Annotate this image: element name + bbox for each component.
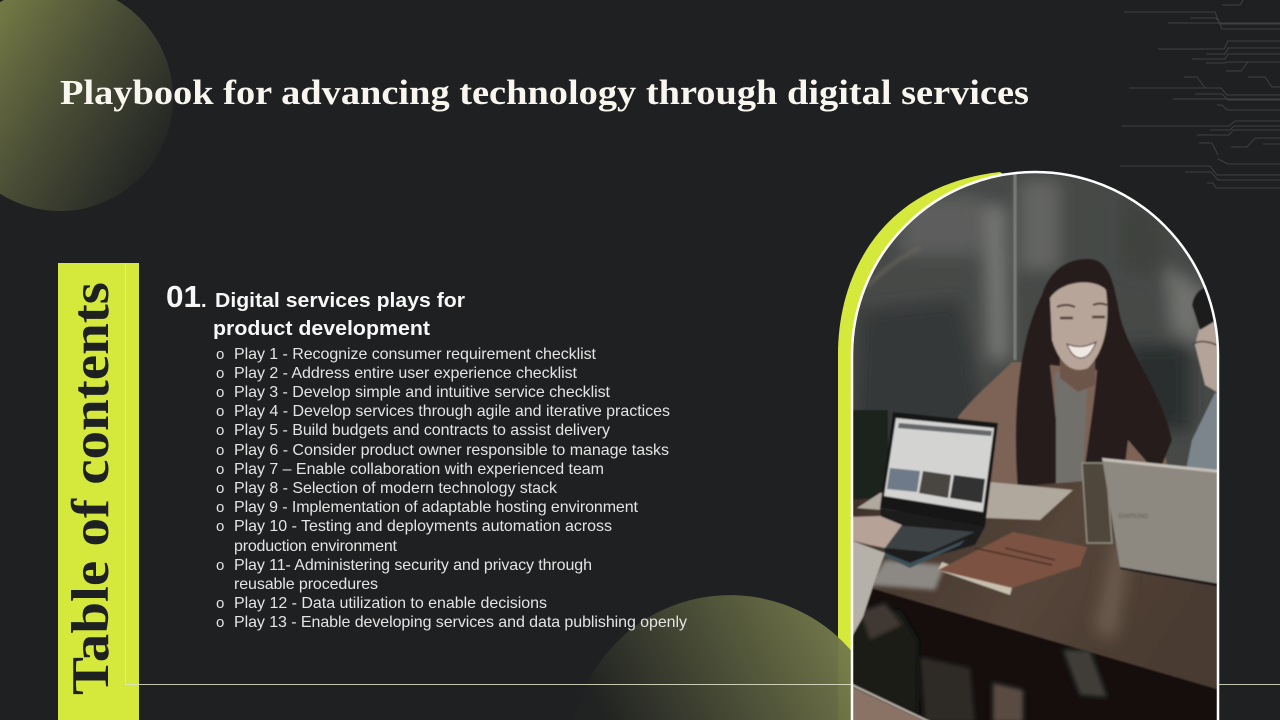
section number: 01	[166, 279, 201, 314]
list of plays: Play 9 - Implementation of adaptable hosting environment	[234, 499, 639, 516]
list of plays: o	[216, 442, 224, 459]
list of plays: o	[216, 480, 224, 497]
woman's neck	[1060, 355, 1095, 392]
table	[850, 470, 1220, 690]
list of plays: o	[216, 499, 224, 516]
lime arch behind photo	[838, 172, 1020, 720]
list of plays: o	[216, 365, 224, 382]
woman's face	[1050, 282, 1107, 370]
circuit line pattern top right	[1120, 0, 1280, 188]
list of plays	[216, 346, 687, 631]
hand and sleeve	[850, 516, 902, 548]
list of plays: Play 2 - Address entire user experience checklist	[234, 365, 578, 382]
list of plays: Play 4 - Develop services through agile and iterative practices	[234, 403, 670, 420]
list of plays: Play 6 - Consider product owner responsible to manage tasks	[234, 442, 669, 459]
list of plays: Play 12 - Data utilization to enable decisions	[234, 595, 547, 612]
list of plays: o	[216, 461, 224, 478]
list of plays: o	[216, 422, 224, 439]
under the table	[850, 578, 1220, 720]
lime sidebar	[58, 263, 139, 720]
heading line one: Digital services plays for	[215, 289, 465, 312]
list of plays: o	[216, 557, 224, 574]
white notebook	[857, 482, 1073, 520]
person on right	[1186, 393, 1217, 470]
list of plays: o	[216, 614, 224, 631]
leather notebook	[938, 532, 1087, 595]
list of plays: o	[216, 403, 224, 420]
lap	[850, 608, 917, 713]
list of plays: Play 1 - Recognize consumer requirement checklist	[234, 346, 597, 363]
photo: team at a table with laptops	[850, 168, 1220, 720]
list of plays: o	[216, 346, 224, 363]
list of plays: Play 7 – Enable collaboration with experienced team	[234, 461, 604, 478]
wall	[853, 173, 1217, 469]
heading line two: product development	[213, 317, 430, 340]
list of plays: Play 11- Administering security and privacy through	[234, 557, 592, 574]
list of plays: production environment	[234, 538, 398, 555]
list of plays: Play 10 - Testing and deployments automation across	[234, 518, 612, 535]
title: Playbook for advancing technology through digital services	[60, 73, 1029, 112]
section number dot: .	[201, 290, 207, 312]
left laptop	[880, 412, 998, 568]
list of plays: o	[216, 595, 224, 612]
list of plays: Play 8 - Selection of modern technology stack	[234, 480, 558, 497]
dark left strip behind laptop	[850, 410, 888, 500]
photo: team at a table with laptops: SAMSUNG	[1118, 514, 1149, 520]
glass	[1082, 463, 1112, 543]
decorative circle bottom	[574, 595, 886, 720]
list of plays: o	[216, 384, 224, 401]
woman's hair	[1016, 259, 1172, 490]
wall seam	[1014, 172, 1016, 360]
horizontal and vertical rule	[126, 263, 1280, 684]
list of plays: Play 3 - Develop simple and intuitive service checklist	[234, 384, 611, 401]
chair	[853, 687, 924, 720]
list of plays: reusable procedures	[234, 576, 378, 593]
white arch outline	[852, 172, 1218, 720]
woman's sweater	[957, 361, 1168, 485]
sidebar heading: table of contents: Table of contents	[62, 282, 120, 695]
right laptop	[1102, 458, 1220, 584]
list of plays: o	[216, 518, 224, 535]
list of plays: Play 13 - Enable developing services and data publishing openly	[234, 614, 687, 631]
list of plays: Play 5 - Build budgets and contracts to assist delivery	[234, 422, 610, 439]
decorative circle top left	[0, 0, 173, 211]
section heading	[166, 279, 465, 340]
wall streak	[867, 248, 920, 287]
